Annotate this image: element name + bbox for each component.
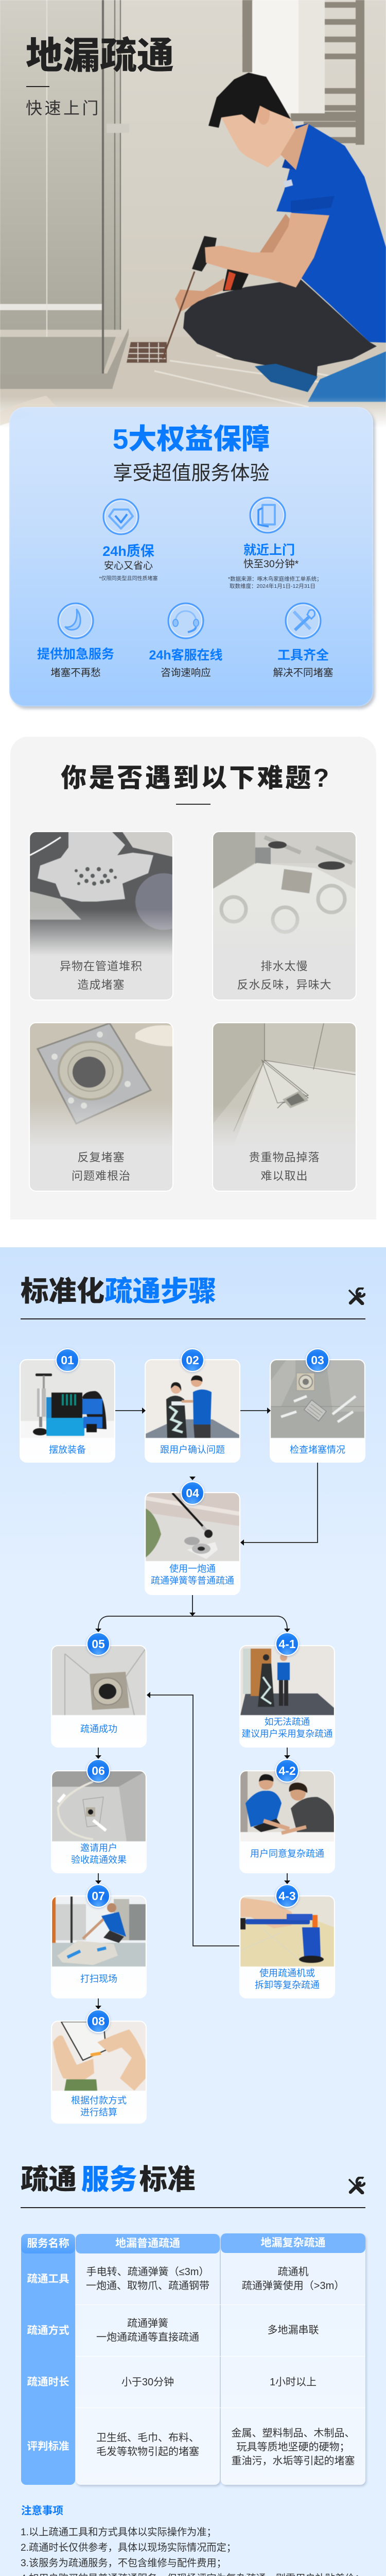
arrow 06 to 07 (95, 1873, 101, 1884)
description: 堵塞不再愁 (50, 667, 101, 679)
description: 安心又省心 (104, 561, 153, 571)
caption: 反水反味，异味大 (237, 978, 331, 991)
photo: recommend complex service (240, 1646, 334, 1716)
badge 03 (306, 1348, 329, 1372)
benefit: nearby service (228, 497, 322, 589)
panel heading: 5大权益保障 (113, 423, 270, 455)
panel: common problems (10, 737, 376, 1219)
row head: method: 疏通方式 (27, 2325, 69, 2336)
cell: standard duration: 小于30分钟 (121, 2377, 174, 2388)
title: 提供加急服务 (37, 647, 114, 662)
icon: door (249, 497, 286, 534)
icon: wrench and screwdriver (348, 1287, 365, 1305)
row head: tools (21, 2253, 75, 2304)
problem card: repeated clog (29, 1022, 173, 1192)
flow arrows (95, 1408, 318, 2009)
caption: 使用一炮通 (169, 1564, 216, 1574)
icon: diamond (103, 499, 139, 535)
badge 02 (181, 1348, 204, 1372)
cell: standard criteria: 毛发等软物引起的堵塞 (96, 2446, 199, 2458)
photo: inspecting drain in water (271, 1360, 364, 1438)
step 4-3 card (239, 1895, 335, 1998)
photo: confirming with customer (146, 1360, 239, 1438)
badge 4-3: 4-3 (278, 1889, 296, 1903)
photo: customer signs agreement (240, 1771, 334, 1841)
badge 04: 04 (186, 1486, 199, 1500)
arrow 03 to 04 (240, 1463, 318, 1546)
badge 06 (86, 1759, 110, 1783)
photo: open drain base (30, 1023, 172, 1138)
badge 08 (86, 2009, 110, 2033)
caption: 进行结算 (80, 2107, 117, 2117)
description: 解决不同堵塞 (273, 667, 334, 679)
cell: complex criteria: 重油污，水垢等引起的堵塞 (232, 2455, 355, 2467)
benefit: 24h warranty (99, 499, 157, 582)
description: 快至30分钟* (243, 558, 299, 570)
caption (249, 1151, 320, 1182)
problems heading: 你是否遇到以下难题? (61, 764, 331, 792)
cell: standard criteria (76, 2431, 220, 2459)
caption: 造成堵塞 (77, 978, 125, 991)
badge 08: 08 (92, 2014, 105, 2028)
section background continuation (0, 1589, 386, 2576)
badge 05: 05 (92, 1637, 105, 1651)
caption: 如无法疏通 (265, 1717, 310, 1727)
panel: 5 benefits (9, 407, 373, 706)
caption (60, 960, 143, 991)
step 4-1 card (239, 1645, 335, 1748)
badge 02: 02 (186, 1353, 199, 1367)
badge 01 (56, 1348, 79, 1372)
cell: standard tools: 手电转、疏通弹簧（≤3m） (86, 2266, 209, 2278)
badge 07: 07 (92, 1889, 105, 1903)
cell: standard method (76, 2317, 220, 2345)
row head: method (21, 2305, 75, 2356)
notes heading: 注意事项 (21, 2505, 63, 2517)
heading: standard steps: 标准化疏通步骤 (21, 1276, 217, 1307)
caption: 排水太慢 (260, 960, 308, 973)
photo: using drain machine (240, 1896, 334, 1967)
caption: 邀请用户 (80, 1843, 117, 1853)
photo: testing with running water (52, 1771, 146, 1841)
step 4-2 card (239, 1770, 335, 1873)
arrow 01 to 02 (115, 1408, 146, 1414)
badge 04 (181, 1481, 204, 1505)
table body: complex column (221, 2233, 365, 2485)
caption (71, 2095, 127, 2117)
caption (151, 1564, 234, 1586)
header: service name (21, 2234, 75, 2253)
badge 4-3 (275, 1884, 299, 1908)
caption: 摆放装备 (49, 1445, 86, 1455)
step 02 card (145, 1359, 240, 1463)
heading: service standards: 疏通服务标准 (21, 2164, 195, 2195)
row head: tools: 疏通工具 (27, 2273, 69, 2285)
cell: standard method: 一炮通疏通等直接疏通 (96, 2332, 199, 2343)
footnote line 2: 取数维度：2024年1月1日-12月31日 (230, 583, 315, 589)
photo: flooded patterned tile (213, 832, 356, 934)
arrow 4-1 to 4-2 (284, 1748, 290, 1759)
photo: tools and kit (21, 1360, 114, 1437)
cell: standard tools: 一炮通、取物爪、疏通钢带 (86, 2280, 209, 2292)
photo: paying on phone (52, 2022, 146, 2091)
caption: 使用疏通机或 (259, 1968, 315, 1978)
caption: 反复堵塞 (77, 1151, 125, 1164)
photo: cleaning up the site (52, 1896, 146, 1967)
arrowhead above 04 (189, 1477, 196, 1480)
note 3: 3.该服务为疏通服务，不包含维修与配件费用； (21, 2558, 226, 2569)
badge 01: 01 (61, 1353, 74, 1367)
header: complex clearing: 地漏复杂疏通 (260, 2237, 325, 2249)
caption (242, 1717, 332, 1739)
photo: cleared drain (52, 1646, 146, 1716)
badge 03: 03 (311, 1353, 324, 1367)
footnote: *仅限同类型且同性质堵塞 (99, 576, 157, 582)
icon: headset (168, 603, 204, 639)
row head: criteria (21, 2408, 75, 2485)
caption (71, 1843, 127, 1865)
caption: 跟用户确认问题 (160, 1445, 225, 1455)
title: 24h客服在线 (149, 648, 223, 663)
cell: complex duration: 1小时以上 (270, 2377, 317, 2388)
cell: standard criteria: 卫生纸、毛巾、布料、 (96, 2432, 199, 2444)
icon: wrench and screwdriver (348, 2177, 365, 2194)
arrow 4-3 back to 05 (147, 1692, 239, 1946)
badge 4-1 (275, 1632, 299, 1656)
footnote: *数据来源：啄木鸟家庭维修工单系统； (228, 576, 322, 582)
step 01 card (20, 1359, 115, 1463)
branch to 05 and 4-1 (95, 1616, 290, 1632)
photo: corner floor drain (213, 1023, 356, 1138)
badge 4-2 (275, 1759, 299, 1783)
problems heading divider (176, 804, 210, 805)
caption: 验收疏通效果 (71, 1855, 127, 1865)
caption: 建议用户采用复杂疏通 (242, 1728, 332, 1739)
cell: complex criteria: 玩具等质地坚硬的硬物； (237, 2442, 350, 2453)
cell: complex tools: 疏通机 (278, 2266, 309, 2278)
comparison table (21, 2233, 366, 2487)
caption (237, 960, 331, 991)
row head: criteria: 评判标准 (27, 2441, 69, 2452)
cell: complex tools: 疏通弹簧使用（>3m） (242, 2280, 344, 2292)
icon: tools (285, 603, 321, 639)
note 1: 1.以上疏通工具和方式具体以实际操作为准； (21, 2527, 217, 2538)
problem card: dropped valuables (212, 1022, 357, 1192)
arrow 04 down to branch (189, 1595, 196, 1616)
step 08 card (51, 2021, 147, 2124)
table body: standard column (76, 2234, 220, 2485)
arrow 05 to 06 (95, 1748, 101, 1759)
arrow 07 to 08 (95, 1998, 101, 2009)
step 04 card (145, 1492, 240, 1595)
hero divider (26, 86, 49, 87)
hero photo: technician clearing a floor drain (0, 0, 386, 426)
photo: foam over drain (30, 832, 172, 953)
caption: 用户同意复杂疏通 (250, 1849, 324, 1859)
caption: 异物在管道堆积 (60, 960, 143, 973)
arrow 02 to 03 (240, 1408, 271, 1414)
step 06 card (51, 1770, 147, 1873)
icon: moon (58, 603, 94, 639)
title: 就近上门 (243, 543, 295, 557)
photo: spring in drain (146, 1493, 239, 1561)
caption (72, 1151, 131, 1182)
benefit: complete tools (273, 603, 334, 679)
title: 24h质保 (102, 544, 154, 559)
caption: 拆卸等复杂疏通 (255, 1980, 320, 1990)
step 05 card (51, 1645, 147, 1748)
header: complex clearing (221, 2233, 365, 2253)
cell: complex method: 多地漏串联 (268, 2325, 319, 2336)
row head: duration: 疏通时长 (27, 2376, 69, 2388)
cell: complex tools (221, 2265, 365, 2293)
cell: standard tools (76, 2265, 220, 2293)
caption: 根据付款方式 (71, 2095, 127, 2106)
section background: service steps and standards (0, 1247, 386, 1589)
hero title: 地漏疏通 (26, 36, 174, 77)
badge 06: 06 (92, 1764, 105, 1777)
notes list (21, 2525, 366, 2576)
caption: 打扫现场 (80, 1974, 117, 1984)
arrow 4-2 to 4-3 (284, 1873, 290, 1884)
caption: 疏通弹簧等普通疏通 (151, 1575, 234, 1586)
cell: complex criteria (221, 2427, 365, 2468)
badge 4-2: 4-2 (278, 1764, 296, 1777)
problem card: slow drainage (212, 831, 357, 1001)
header: standard clearing: 地漏普通疏通 (115, 2238, 180, 2249)
caption: 问题难根治 (72, 1170, 131, 1182)
title: 工具齐全 (277, 648, 329, 663)
header: standard clearing (76, 2234, 220, 2253)
step 03 card (270, 1359, 365, 1463)
hero subtitle: 快速上门 (26, 99, 101, 117)
note 2: 2.疏通时长仅供参考，具体以现场实际情况而定； (21, 2543, 236, 2553)
row head: duration (21, 2357, 75, 2408)
panel subheading: 享受超值服务体验 (113, 463, 270, 484)
badge 07 (86, 1884, 110, 1908)
caption: 难以取出 (260, 1170, 308, 1182)
benefit: online support (149, 603, 223, 679)
badge 4-1: 4-1 (278, 1637, 296, 1651)
cell: complex criteria: 金属、塑料制品、木制品、 (232, 2428, 355, 2439)
badge 05 (86, 1632, 110, 1656)
row head column background (21, 2234, 75, 2485)
benefit: emergency service (37, 603, 114, 679)
caption (255, 1968, 320, 1990)
caption: 检查堵塞情况 (290, 1445, 345, 1455)
description: 咨询速响应 (161, 667, 211, 679)
step 07 card (51, 1895, 147, 1998)
problem card: debris (29, 831, 173, 1001)
caption: 疏通成功 (80, 1724, 117, 1734)
cell: standard method: 疏通弹簧 (127, 2318, 168, 2329)
header: service name: 服务名称 (27, 2238, 69, 2249)
caption: 贵重物品掉落 (249, 1151, 320, 1164)
